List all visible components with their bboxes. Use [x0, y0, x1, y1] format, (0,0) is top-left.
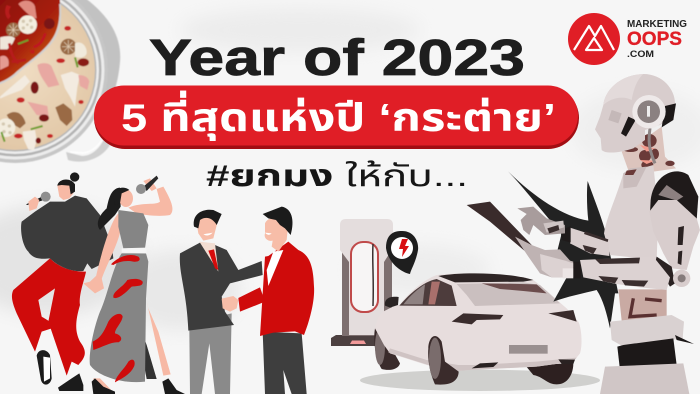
hoodie	[21, 196, 113, 271]
logo wordmark: OOPS	[627, 29, 682, 50]
ear disc	[632, 95, 666, 128]
neck mesh	[622, 127, 676, 175]
microphone	[143, 176, 158, 191]
charger base	[331, 335, 382, 346]
ingredients in zoomed coordinates	[0, 1, 89, 150]
leg	[146, 298, 171, 376]
illustration: car	[360, 273, 600, 391]
lower hand	[515, 237, 573, 278]
subtitle: #ยกมง ให้กับ...	[206, 160, 468, 193]
neck spine	[623, 134, 675, 170]
illustration: hot pot	[0, 0, 120, 163]
illustration: EV charger	[331, 219, 418, 346]
rear window	[457, 282, 560, 306]
far wheel	[525, 363, 573, 384]
man in dark suit	[180, 210, 263, 394]
body	[375, 273, 582, 371]
logo wordmark	[627, 19, 687, 60]
black headset plates	[662, 103, 676, 127]
upper forearm	[570, 228, 609, 256]
belt	[122, 248, 147, 253]
logo wordmark: .COM	[627, 49, 654, 60]
head and neck	[595, 74, 676, 175]
side windows	[399, 279, 457, 306]
rear wheel	[428, 336, 459, 385]
lower arm	[96, 213, 122, 279]
lower forearm	[580, 257, 670, 290]
arm and microphone	[26, 197, 43, 205]
light broth	[0, 0, 95, 150]
roof	[438, 273, 533, 282]
skull	[595, 74, 675, 153]
sneakers	[37, 350, 52, 385]
hair	[98, 188, 121, 230]
illustration: handshake	[180, 207, 314, 394]
shirt	[267, 250, 283, 286]
tail lights	[452, 313, 503, 324]
shaking hands	[222, 296, 238, 312]
raised arm	[128, 187, 172, 216]
pot rim	[0, 0, 108, 163]
charger slot	[351, 242, 378, 312]
grey trousers	[189, 313, 232, 394]
shirt and tie	[199, 242, 218, 272]
torso	[604, 165, 658, 260]
red dress patches	[93, 255, 143, 382]
dark trousers	[263, 332, 307, 394]
logo: Marketing Oops	[568, 13, 687, 65]
charger dark sides	[342, 248, 392, 336]
black starburst	[507, 170, 618, 328]
logo wordmark: MARKETING	[627, 19, 687, 30]
licence plate	[509, 345, 548, 354]
title: Year of 2023	[149, 29, 525, 86]
face	[119, 190, 133, 207]
illustration: robot	[467, 74, 700, 394]
upper wrist	[561, 226, 571, 243]
red blazer	[260, 242, 314, 336]
shoulder	[650, 171, 698, 220]
spicy broth ingredients	[0, 1, 55, 70]
pelvis	[610, 315, 684, 347]
pot back handle	[68, 0, 120, 112]
heels	[92, 378, 185, 394]
upper hand	[517, 207, 565, 235]
banner text: 5 ที่สุดแห่งปี ‘กระต่าย’	[121, 90, 556, 141]
hip	[600, 363, 689, 394]
red banner	[94, 86, 579, 149]
upper arm	[649, 200, 700, 270]
male singer	[12, 172, 113, 391]
dark jacket	[180, 243, 263, 331]
illustration: singers	[12, 172, 185, 394]
female singer	[83, 176, 185, 394]
front wheel	[374, 326, 400, 370]
arms, zoomed coordinates	[515, 207, 690, 290]
abdomen	[618, 289, 667, 321]
skirt lining	[139, 325, 157, 379]
lower body shade	[388, 348, 577, 371]
charger body	[340, 219, 393, 335]
man in red blazer	[238, 207, 314, 394]
tablet	[467, 202, 535, 254]
logo mark	[568, 13, 620, 65]
head	[197, 216, 217, 241]
location pin	[386, 231, 418, 274]
spicy broth	[0, 0, 60, 83]
lower wrist	[573, 262, 581, 278]
head	[265, 218, 288, 252]
exhausts	[472, 359, 575, 368]
elbow joint	[673, 270, 690, 287]
light broth ingredients	[0, 26, 89, 150]
mirror	[385, 297, 399, 308]
red trousers	[12, 258, 86, 376]
ground shadow	[360, 370, 600, 391]
dress	[90, 210, 148, 382]
head	[57, 181, 74, 200]
